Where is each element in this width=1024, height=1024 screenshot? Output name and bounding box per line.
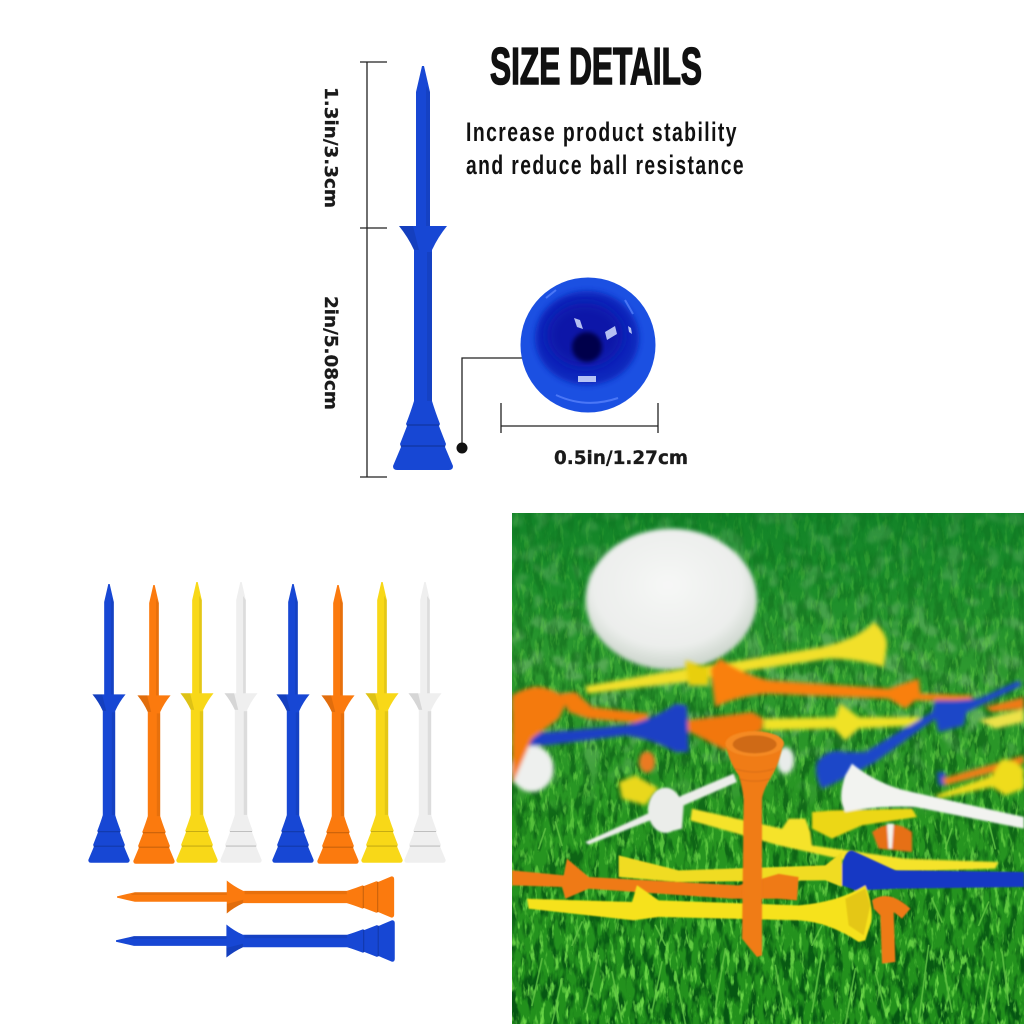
label: cup width: 0.5in/1.27cm	[554, 447, 688, 469]
title: SIZE DETAILS	[490, 38, 702, 96]
text block: product benefit	[466, 117, 745, 180]
golf ball	[586, 529, 757, 670]
foreground tees	[512, 850, 1024, 964]
icon: white tee	[404, 582, 446, 863]
label: bottom height: 2in/5.08cm	[320, 296, 341, 410]
icon: white tee	[220, 582, 262, 863]
grass blades over tees	[532, 822, 1009, 1024]
text block: product benefit: Increase product stability	[466, 117, 738, 147]
panel: size details	[320, 38, 745, 477]
icon: yellow tee	[176, 582, 218, 863]
icon: orange tee	[317, 585, 359, 864]
icon: tee cup seen from above	[520, 278, 656, 412]
height dimension bracket	[360, 62, 387, 477]
grass background	[512, 513, 1024, 1024]
icon: horizontal orange tee	[117, 876, 394, 918]
icon: blue tee	[88, 584, 130, 863]
panel: colour range of tees	[88, 582, 446, 962]
mid-ground tees	[585, 764, 1024, 872]
icon: yellow tee	[361, 582, 403, 863]
icon: orange tee	[133, 585, 175, 864]
label: top height: 1.3in/3.3cm	[320, 87, 341, 208]
text block: product benefit: and reduce ball resistance	[466, 150, 745, 180]
icon: horizontal blue tee	[116, 920, 395, 962]
background tees (soft focus)	[510, 622, 1024, 805]
orange tee standing upright	[725, 731, 784, 957]
dimension: cup width	[501, 403, 658, 433]
icon: blue tee	[272, 584, 314, 863]
panel: photo of tees on grass	[510, 513, 1024, 1024]
icon: large blue tee	[393, 66, 453, 470]
callout: leader line to cup	[456, 358, 522, 454]
